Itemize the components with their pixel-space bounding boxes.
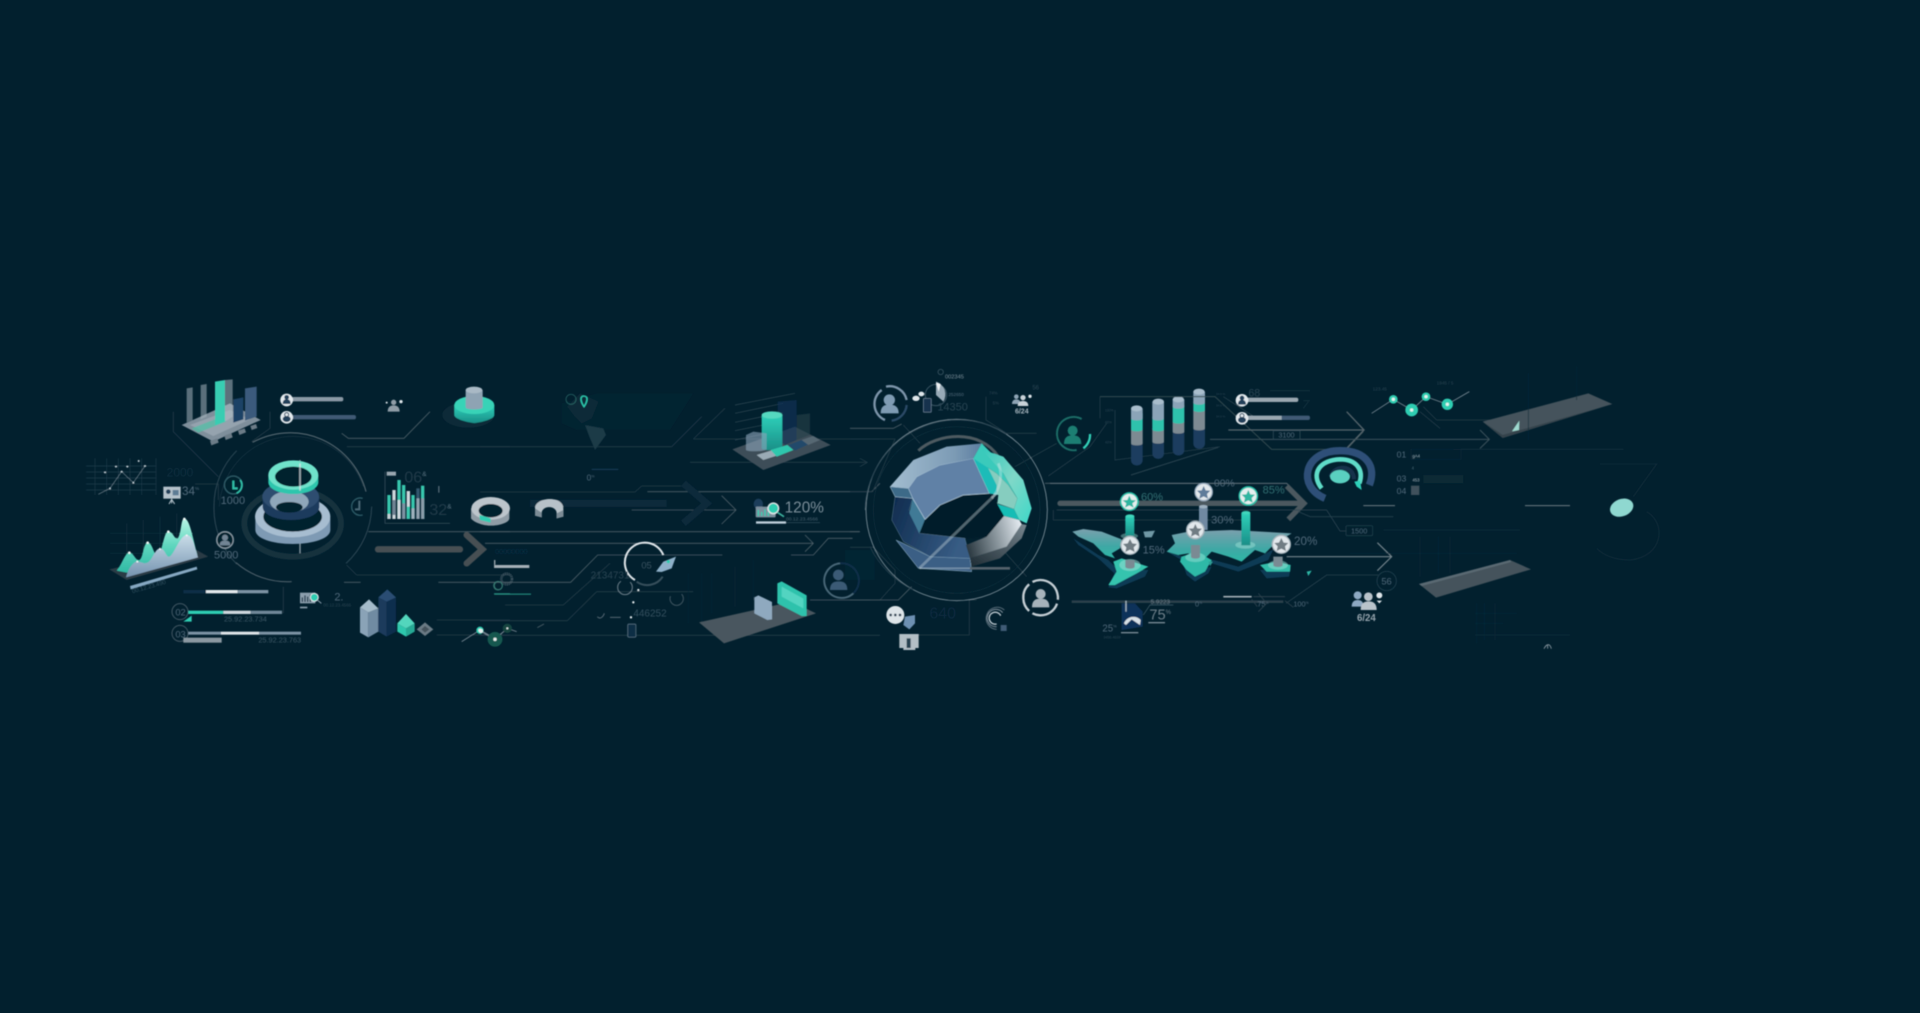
people count 6/24: 56 (1381, 577, 1392, 587)
pie icon with numbers: 14350 (937, 402, 968, 414)
progress bar list: 25.92.23.763 (258, 635, 301, 644)
faint grid fragment (1350, 367, 1577, 643)
lower arrow (1287, 543, 1392, 571)
cyl 2 (1152, 402, 1164, 459)
icon rows with progress bars (280, 394, 356, 424)
chat icons and monitor: 640 (929, 605, 956, 622)
pie icon with numbers (912, 369, 968, 414)
progress bar list: 03 (175, 629, 186, 639)
progress bar list (172, 590, 301, 644)
people count 6/24 top: 56 (1032, 385, 1040, 391)
small bars and gears (494, 560, 511, 594)
ring spinner icon (986, 607, 1007, 631)
map pin: 60%: 60% (1141, 492, 1163, 504)
map pin: 20% (1268, 535, 1317, 570)
line chart with grid (86, 458, 156, 495)
clock icon and 1000 (221, 476, 245, 507)
pie icon with numbers: 002345 (945, 374, 964, 380)
icon: magnifier and 2.: 2. (334, 592, 344, 604)
stacked rings centre left (244, 460, 341, 557)
document icon with 75% and 25%: % (1113, 624, 1117, 629)
map scale labels: % (1199, 601, 1202, 605)
people count 6/24 top: 5% (993, 401, 999, 406)
people count 6/24: 6/24 (1357, 613, 1376, 624)
platform with screens (688, 560, 816, 643)
map pin: 00% (1195, 479, 1235, 530)
map pin: 20%: 20% (1294, 535, 1317, 548)
teal person gauge (1057, 417, 1090, 450)
rocket gauge 05 (591, 543, 683, 637)
document icon with 75% and 25%: 25 (1102, 624, 1113, 635)
document icon with 75% and 25%: % (1166, 610, 1172, 616)
chat icons and monitor (886, 605, 956, 650)
progress bar list: 25.92.23.734 (224, 615, 267, 624)
people count 6/24 top: 74% (989, 391, 998, 396)
dashboard fragment: 00000000 (495, 547, 528, 556)
teal segment (973, 458, 1017, 509)
highlight lines (919, 493, 997, 568)
circuit lines: right (1100, 397, 1623, 506)
vertical bars with cylinders (1100, 389, 1220, 475)
map pin: 60% (1121, 492, 1163, 539)
network node continuation (479, 624, 517, 647)
3D chart on platform (732, 393, 831, 470)
vertical bars chart: & (447, 503, 452, 510)
3D donut (890, 437, 1032, 572)
teal gauge icon (1307, 451, 1372, 498)
map scale labels: 75 (1257, 600, 1265, 609)
vertical bars chart: 32 (429, 502, 447, 519)
numbered list: 4 (1412, 465, 1415, 470)
infographic band (86, 367, 1659, 650)
icon: magnifier and 2.: 00.12.23.4566 (323, 603, 352, 608)
rocket gauge 05: 2134731 (591, 570, 630, 581)
panel: 3D bar chart top left (182, 379, 261, 445)
rocket gauge 05: 05 (641, 561, 652, 571)
gray arrow (378, 535, 482, 563)
teal node line chart: 123.45 (1373, 387, 1387, 392)
gray right segment (970, 524, 1027, 567)
magnifier report 120%: 120% (785, 499, 824, 516)
section: centre ring (850, 369, 1250, 650)
map pin: 30% (1185, 514, 1234, 562)
document icon with 75% and 25% (1102, 599, 1173, 640)
faint chevron (530, 483, 707, 523)
vertical bars with cylinders: 100% (1105, 409, 1114, 413)
ring outlines (865, 419, 1047, 601)
section: far right fragments (1350, 367, 1659, 649)
vertical bars with cylinders: 40% (1105, 440, 1112, 444)
section: world map (1050, 479, 1396, 640)
icon: people group (386, 400, 403, 412)
vertical bars chart (385, 470, 452, 523)
pie icon with numbers: 252650 (948, 392, 964, 397)
icon rows right with bars (1216, 388, 1310, 425)
faint world map with pin: 0 (587, 473, 591, 483)
progress bar list: 02 (175, 608, 186, 618)
circuit lines: middle (480, 408, 880, 635)
arc behind donut (918, 437, 998, 457)
numbered list: gA4 (1412, 453, 1421, 458)
platform slab bottom (1419, 560, 1531, 598)
vertical bars with cylinders: 80% (1105, 420, 1112, 424)
section: middle left cluster (479, 393, 880, 647)
numbered list: 03 (1397, 474, 1406, 484)
magnifier report 120%: 00.12.23.4566 (786, 516, 818, 522)
person icon and 5000: 5000 (214, 550, 238, 562)
section: left cluster (86, 379, 511, 647)
numbered list: 01 (1397, 449, 1406, 459)
document icon with 75% and 25%: 75 (1149, 607, 1166, 623)
teal node line chart (1372, 380, 1469, 416)
teal network nodes bottom (462, 627, 510, 647)
platform slab top (1483, 393, 1612, 438)
circuit lines: left (173, 412, 510, 635)
clock icon right of ring (352, 498, 363, 515)
label 3100: 3100 (1278, 431, 1295, 440)
numbered list (1397, 449, 1463, 496)
section: right cluster (1100, 380, 1623, 506)
navy lower segment (896, 540, 972, 572)
label 1500 (1346, 526, 1373, 536)
dashboard fragment (494, 547, 531, 595)
map pin: 15%: 15% (1143, 544, 1165, 556)
cyl 3 (1173, 399, 1184, 455)
faint world map with pin: % (591, 474, 595, 478)
map line and arrow (1050, 483, 1393, 603)
map pin: 85%: 85% (1263, 484, 1285, 496)
numbered list: 453 (1412, 478, 1420, 483)
person icon and 5000 (214, 532, 238, 562)
central ring circle frame (214, 433, 372, 582)
small arch icon (1544, 645, 1551, 649)
icon: teal 3D cylinder (442, 387, 494, 428)
icon rows right with bars: 34.6 % (1216, 414, 1226, 418)
cyl 4 (1193, 392, 1205, 449)
teal ellipse with faint loop (1597, 464, 1659, 560)
numbered list: 04 (1397, 486, 1406, 496)
isometric cubes (360, 589, 433, 637)
vertical bars chart: & (422, 471, 427, 478)
hole (919, 493, 1004, 538)
map scale labels: % (1306, 601, 1309, 605)
cyl 1 (1131, 408, 1143, 465)
person gauge top left (874, 386, 907, 421)
document icon with 75% and 25%: 5.9223 (1151, 599, 1171, 606)
icon rows right with bars: 68 (1248, 388, 1260, 400)
teal node line chart: 1945 / 5 (1437, 380, 1454, 385)
vertical bars chart: 06 (404, 470, 422, 487)
map pin: 00%: 00% (1214, 479, 1235, 490)
icon: presentation board and 34% (163, 466, 199, 504)
magnifier report 120% (754, 499, 824, 524)
icon: presentation board and 34%: 2000 (167, 466, 194, 480)
map scale labels: 0 (1195, 600, 1199, 609)
clock icon and 1000: 1000 (221, 495, 245, 507)
label 1500: 1500 (1351, 526, 1367, 535)
label 3100 (1273, 431, 1300, 440)
map scale labels: 100 (1293, 600, 1306, 609)
circuit lines: centre (850, 397, 1250, 635)
people count 6/24 (1352, 571, 1396, 624)
icon rows right with bars: 34.6 % (1216, 404, 1226, 408)
world map silhouette (1072, 529, 1312, 588)
area chart mountains on platform: 00.12.23.490 (132, 580, 167, 595)
map pin: 30%: 30% (1211, 514, 1234, 526)
icon: presentation board and 34%: % (195, 486, 199, 491)
map scale labels: % (1265, 601, 1268, 605)
faint world map with pin (562, 393, 693, 483)
rocket gauge 05: 446252 (633, 609, 667, 620)
map pin: 85% (1235, 484, 1285, 549)
people count 6/24 top: 6/24 (1015, 409, 1029, 416)
person gauge lower right (1023, 580, 1058, 615)
gray 3D arch (535, 499, 563, 518)
map scale labels (1195, 593, 1309, 612)
area chart mountains on platform (109, 513, 208, 595)
blue top face and wall (908, 458, 989, 519)
icon rows right with bars: 34.6 % (1216, 392, 1226, 396)
icon: magnifier and 2. (300, 592, 352, 608)
ring 3D gray (471, 497, 510, 526)
people count 6/24 top (989, 385, 1040, 416)
document icon with 75% and 25%: 3456.4639 (1103, 636, 1121, 640)
icon: presentation board and 34%: 34 (182, 485, 195, 498)
dim person gauge (824, 550, 875, 598)
map pin: 15% (1119, 536, 1165, 571)
